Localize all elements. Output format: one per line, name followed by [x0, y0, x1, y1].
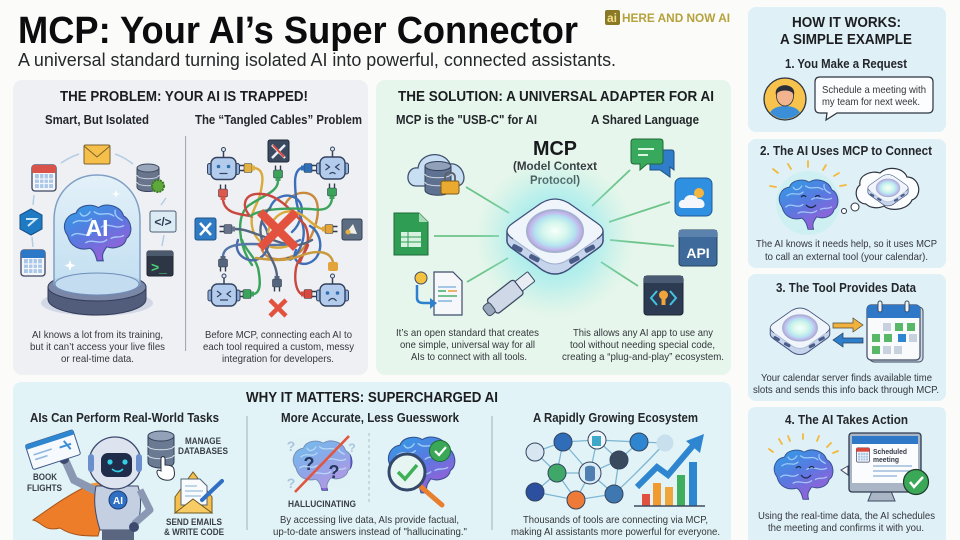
label: book flights: FLIGHTS: [27, 483, 62, 494]
icon: database with hand: [148, 431, 174, 480]
icon: developer window: [644, 276, 683, 315]
problem heading: THE PROBLEM: YOUR AI IS TRAPPED!: [60, 89, 308, 105]
icon: calendar top left: [32, 165, 56, 191]
step 3 body text: [753, 372, 939, 396]
step 4 body text: the meeting and confirms it with you.: [768, 522, 924, 534]
chart: growth bars with arrow: [634, 434, 705, 506]
label: book flights: BOOK: [33, 472, 57, 483]
problem body text left: or real-time data.: [61, 353, 134, 365]
step 4 body text: Using the real-time data, the AI schedules: [758, 510, 935, 522]
icon: code document: [415, 272, 462, 315]
solution body text right: creating a “plug-and-play” ecosystem.: [562, 351, 724, 363]
speech bubble: Schedule a meeting with: [822, 84, 926, 96]
problem body text right: integration for developers.: [222, 353, 334, 365]
icon: envelope: [84, 145, 110, 164]
logo: Here and Now AI: HERE AND NOW AI: [622, 11, 730, 25]
icon: robot top left: [208, 148, 240, 180]
illustration: robot with cape: AI: [113, 496, 123, 507]
subheading: more accurate: More Accurate, Less Guesswork: [281, 411, 459, 425]
icon: robot top right: [316, 147, 348, 179]
icon: terminal: [147, 251, 173, 276]
label: hallucinating: HALLUCINATING: [288, 499, 356, 510]
icon: code window: </>: [154, 215, 172, 229]
step 2 body text: [756, 238, 937, 263]
icon: weather: [675, 178, 712, 216]
icon: hallucinating brain: [287, 436, 356, 492]
title: MCP: Your AI’s Super Connector: [18, 10, 578, 52]
subheading: smart but isolated: Smart, But Isolated: [45, 113, 149, 127]
label: manage databases: MANAGE: [185, 436, 221, 447]
why heading: WHY IT MATTERS: SUPERCHARGED AI: [246, 390, 498, 406]
icon: code window: [150, 211, 176, 232]
panel: why it matters: [13, 382, 731, 540]
panel: step 4: [748, 407, 946, 540]
how it works heading: HOW IT WORKS:: [792, 15, 901, 31]
solution heading: THE SOLUTION: A UNIVERSAL ADAPTER FOR AI: [398, 89, 714, 105]
subheading: real-world tasks: AIs Can Perform Real-World Tasks: [30, 411, 219, 425]
icon: hub: [770, 308, 830, 355]
solution body text left: It’s an open standard that creates: [396, 327, 539, 339]
icon: robot bottom right: [316, 274, 348, 306]
icon: blue tools: [195, 218, 216, 240]
step 3 body text: Your calendar server finds available time: [761, 372, 932, 384]
icon: API window: [679, 230, 717, 266]
logo: Here and Now AI: ai: [607, 11, 617, 25]
panel: the solution: [376, 80, 731, 375]
icon: wrench tool: [268, 140, 289, 162]
label: send emails and write code: & WRITE CODE: [164, 527, 224, 538]
step 4 heading: 4. The AI Takes Action: [785, 413, 908, 427]
step 2 body text: to call an external tool (your calendar).: [765, 251, 928, 263]
problem body text right: each tool required a custom, messy: [203, 341, 355, 353]
label: book flights: [27, 472, 62, 494]
icon: cloud database: [408, 155, 464, 195]
MCP label: Protocol): [530, 173, 580, 187]
accuracy body text: [273, 514, 467, 538]
step 1 heading: 1. You Make a Request: [785, 57, 908, 71]
problem body text left: but it can’t access your live files: [30, 341, 165, 353]
step 2 body text: The AI knows it needs help, so it uses MCP: [756, 238, 937, 250]
MCP label: [513, 138, 597, 187]
icon: spreadsheet: [394, 213, 428, 255]
icon: robot bottom left: [208, 274, 240, 306]
solution body text right: [562, 327, 724, 363]
icon: monitor with scheduled meeting: [841, 433, 928, 501]
icon: database with gear: [137, 164, 164, 192]
solution body text right: This allows any AI app to use any: [573, 327, 714, 339]
icon: hallucinating brain: ?: [328, 462, 340, 482]
icon: blue cube: [20, 209, 42, 235]
icon: exchange arrows: [833, 318, 863, 347]
panel: the problem: [13, 80, 368, 375]
icon: chat bubbles: [631, 139, 674, 177]
icon: plane ticket: [25, 430, 81, 470]
icon: calendar with checks: [867, 301, 923, 362]
problem body text right: [203, 329, 355, 365]
connector lines: [434, 170, 674, 286]
icon: smiling brain with rays: [769, 434, 838, 499]
icon: AI brain in glass dome: [41, 175, 153, 316]
ecosystem body text: making AI assistants more powerful for everyone.: [511, 526, 720, 538]
step 3 heading: 3. The Tool Provides Data: [776, 281, 917, 295]
MCP label: (Model Context: [513, 159, 597, 173]
step 4 body text: [758, 510, 935, 534]
subheading: tangled cables: The “Tangled Cables” Problem: [195, 113, 362, 127]
icon: happy brain with rays: [770, 161, 846, 235]
icon: hallucinating brain: ?: [348, 441, 356, 455]
icon: AI brain in glass dome: AI: [86, 215, 108, 241]
subheading: ecosystem: A Rapidly Growing Ecosystem: [533, 411, 698, 425]
icon: user avatar: [764, 78, 806, 122]
icon: USB-C plug: [480, 269, 537, 319]
accuracy body text: By accessing live data, AIs provide factual,: [280, 514, 459, 526]
label: send emails and write code: [164, 517, 224, 538]
icon: thought bubble with hub: [842, 168, 919, 214]
icon: hallucinating brain: ?: [304, 454, 314, 474]
how it works heading: A SIMPLE EXAMPLE: [780, 32, 912, 48]
icon: terminal: >_: [151, 259, 167, 275]
icon: monitor with scheduled meeting: meeting: [873, 457, 899, 464]
icon: calendar bottom left: [21, 250, 45, 276]
subheading: shared language: A Shared Language: [591, 113, 699, 127]
diagram: tool network: [526, 431, 673, 509]
solution body text left: [396, 327, 539, 363]
panel: step 3: [748, 274, 946, 401]
icon: API window: API: [686, 245, 710, 261]
panel: how it works step 1: [748, 7, 946, 132]
ecosystem body text: [511, 514, 720, 538]
problem body text left: [30, 329, 165, 365]
accuracy body text: up-to-date answers instead of "hallucinating.": [273, 526, 467, 538]
icon: MCP hub: [475, 158, 635, 318]
icon: hallucinating brain: ?: [287, 438, 295, 454]
icon: monitor with scheduled meeting: Scheduled: [873, 449, 907, 456]
diagram: tangled cables: [218, 164, 338, 316]
how it works heading: [780, 15, 912, 48]
label: send emails and write code: SEND EMAILS: [166, 517, 222, 528]
speech bubble: my team for next week.: [822, 96, 920, 108]
icon: magnifier over brain: [388, 437, 455, 505]
step 3 body text: slots and sends this info back through MCP.: [753, 384, 939, 396]
icon: envelope with pen: [175, 472, 222, 513]
solution body text left: one simple, universal way for all: [400, 339, 535, 351]
icon: hallucinating brain: ?: [287, 475, 295, 491]
MCP label: MCP: [533, 138, 577, 160]
label: manage databases: [178, 436, 228, 457]
problem body text left: AI knows a lot from its training,: [32, 329, 163, 341]
speech bubble: [815, 77, 933, 120]
solution body text left: AIs to connect with all tools.: [411, 351, 527, 363]
step 2 heading: 2. The AI Uses MCP to Connect: [760, 144, 933, 158]
ecosystem body text: Thousands of tools are connecting via MCP,: [523, 514, 708, 526]
icon: paint tool: [342, 219, 362, 240]
panel: step 2: [748, 139, 946, 268]
subheading: usb-c: MCP is the "USB-C" for AI: [396, 113, 537, 127]
subtitle: A universal standard turning isolated AI into powerful, connected assistants.: [18, 50, 616, 70]
problem body text right: Before MCP, connecting each AI to: [205, 329, 352, 341]
solution body text right: tool without needing special code,: [570, 339, 715, 351]
illustration: robot with cape: [33, 437, 150, 540]
label: manage databases: DATABASES: [178, 446, 228, 457]
